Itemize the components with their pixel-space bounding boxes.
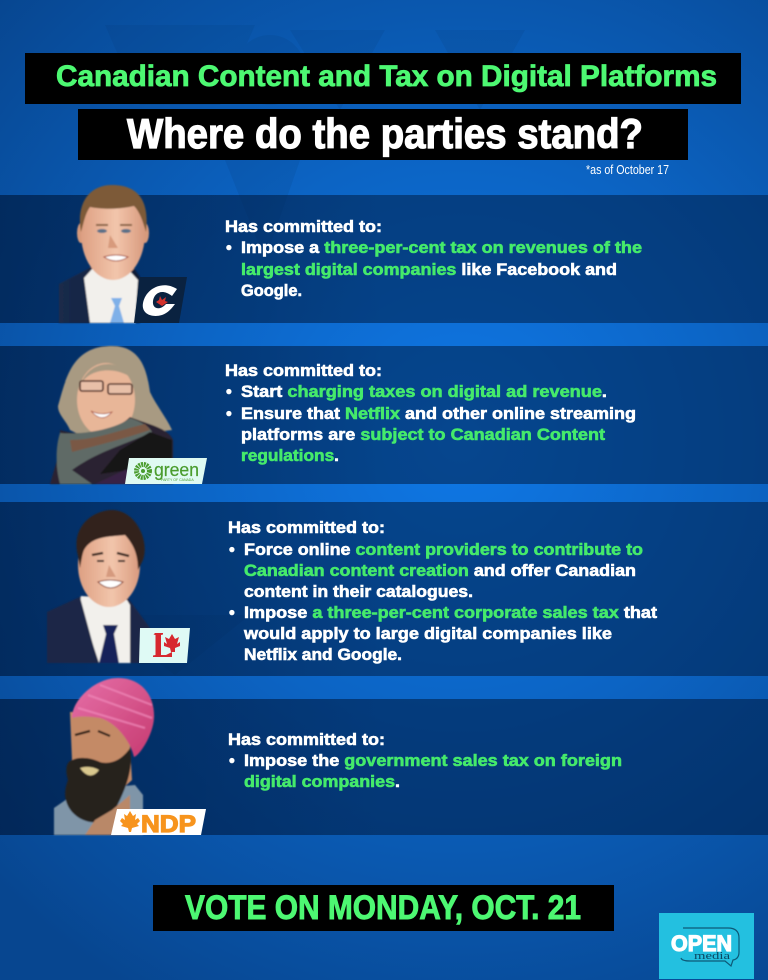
logo: NDP: [111, 809, 206, 838]
logo: NDP: NDP: [141, 811, 196, 838]
text block: Green commitments: Ensure that Netflix and other online streaming: [241, 405, 636, 423]
logo: Green: green: [154, 460, 199, 480]
text block: Conservative commitments: Has committed to:: [225, 218, 382, 236]
logo: Green: PARTY OF CANADA: [161, 478, 194, 482]
text block: Liberal commitments: [228, 519, 658, 664]
text block: Liberal commitments: •: [229, 541, 235, 559]
text block: Conservative commitments: Google.: [241, 282, 302, 300]
text block: Liberal commitments: content in their catalogues.: [244, 583, 473, 601]
text block: Conservative commitments: Impose a three-per-cent tax on revenues of the: [241, 239, 642, 257]
text block: NDP commitments: Has committed to:: [228, 731, 385, 749]
text block: Liberal commitments: Netflix and Google.: [244, 646, 402, 664]
text block: Conservative commitments: •: [226, 239, 232, 257]
portrait: Green leader: [50, 346, 173, 484]
text block: Green commitments: •: [226, 383, 232, 401]
text block: Green commitments: platforms are subject to Canadian Content: [241, 426, 606, 444]
text block: Conservative commitments: [225, 218, 642, 300]
text block: Liberal commitments: Canadian content creation and offer Canadian: [244, 562, 636, 580]
text block: Liberal commitments: Has committed to:: [228, 519, 385, 537]
text block: Green commitments: Start charging taxes on digital ad revenue .: [241, 383, 607, 401]
logo: Green: [125, 458, 207, 484]
subtitle: Where do the parties stand?: [127, 110, 643, 157]
text block: Liberal commitments: •: [229, 604, 235, 622]
logo: OpenMedia: [659, 913, 754, 979]
text block: Green commitments: Has committed to:: [225, 362, 382, 380]
portrait: NDP leader: [54, 678, 154, 835]
text block: NDP commitments: [228, 731, 622, 791]
call to action: VOTE ON MONDAY, OCT. 21: [185, 889, 581, 927]
background watermark shapes: [95, 25, 525, 675]
text block: NDP commitments: digital companies .: [244, 773, 400, 791]
text block: NDP commitments: •: [229, 752, 235, 770]
date note: *as of October 17: [586, 162, 669, 177]
title: [25, 53, 741, 104]
logo: OpenMedia: OPEN: [671, 931, 732, 956]
band 4 background: [0, 699, 768, 835]
band 2 background: [0, 346, 768, 484]
text block: Liberal commitments: would apply to large digital companies like: [243, 625, 612, 643]
logo: Liberal: [139, 628, 190, 663]
title: Canadian Content and Tax on Digital Platforms: [56, 60, 717, 93]
text block: NDP commitments: Impose the government sales tax on foreign: [244, 752, 622, 770]
logo: Conservative: [134, 277, 187, 323]
band 1 background: [0, 195, 768, 323]
text block: Green commitments: [225, 362, 636, 465]
portrait: Conservative leader: [59, 185, 149, 323]
text block: Liberal commitments: Impose a three-per-cent corporate sales tax that: [244, 604, 658, 622]
text block: Conservative commitments: largest digital companies like Facebook and: [241, 261, 617, 279]
text block: Green commitments: •: [226, 405, 232, 423]
portrait: Liberal leader: [47, 510, 150, 663]
logo: OpenMedia: media: [694, 950, 730, 962]
text block: Liberal commitments: Force online content providers to contribute to: [244, 541, 643, 559]
band 3 background: [0, 502, 768, 676]
text block: Green commitments: regulations .: [241, 447, 339, 465]
